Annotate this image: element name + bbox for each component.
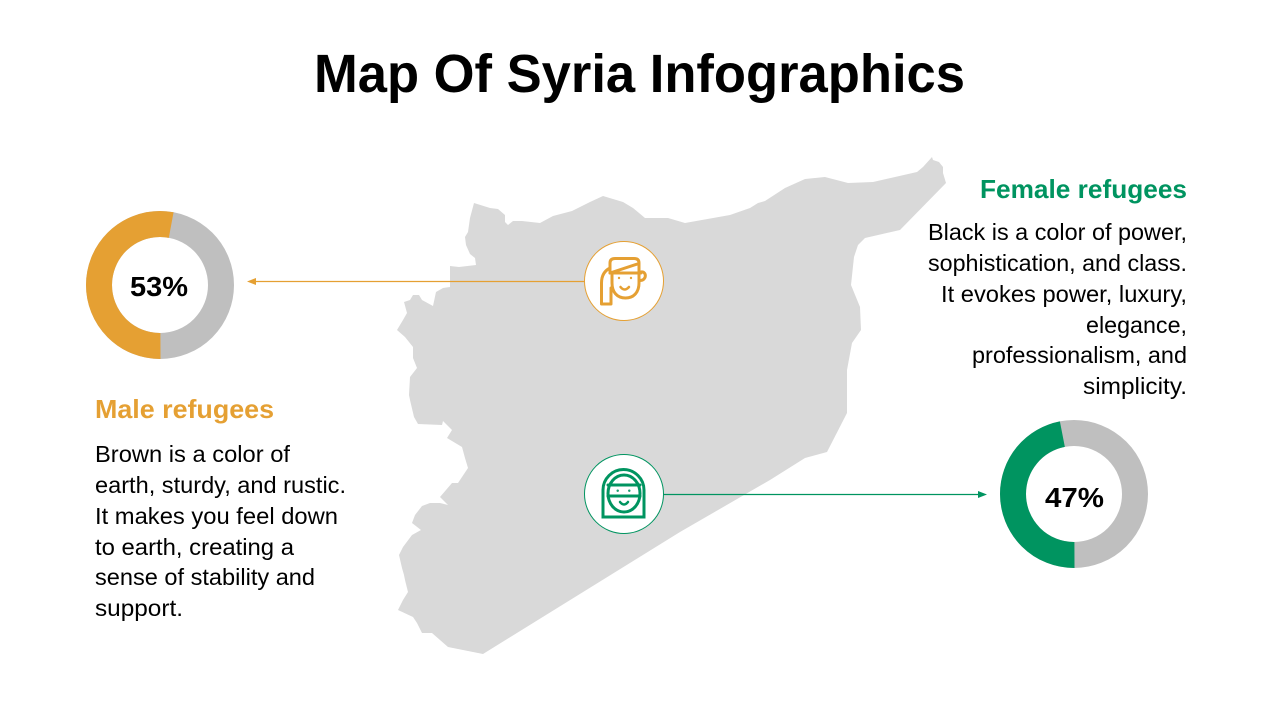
map of Syria <box>397 157 946 654</box>
text block: male description: to earth, creating a <box>95 534 294 560</box>
text block: female description: sophistication, and class. <box>928 250 1187 276</box>
title: Map Of Syria Infographics <box>314 44 965 104</box>
text block: female description: professionalism, and <box>972 342 1187 368</box>
donut chart: female 47%: 47% <box>1045 482 1104 513</box>
text block: male description: earth, sturdy, and rustic. <box>95 472 346 498</box>
icon: female refugee <box>584 454 664 534</box>
icon: male refugee <box>584 242 664 320</box>
arrow: male icon to male donut <box>247 278 585 285</box>
text block: male description: sense of stability and <box>95 564 315 590</box>
text block: male description: It makes you feel down <box>95 503 338 529</box>
heading: female refugees: Female refugees <box>980 174 1187 204</box>
text block: female description <box>928 219 1187 399</box>
text block: male description: support. <box>95 595 183 621</box>
text block: female description: It evokes power, luxury, <box>941 281 1187 307</box>
heading: male refugees: Male refugees <box>95 394 274 424</box>
text block: female description: elegance, <box>1086 312 1187 338</box>
text block: female description: simplicity. <box>1083 373 1187 399</box>
donut chart: male 53%: 53% <box>130 271 188 302</box>
arrow: female icon to female donut <box>663 491 987 498</box>
donut chart: male 53% <box>99 224 221 346</box>
donut chart: female 47% <box>1013 433 1135 555</box>
text block: male description: Brown is a color of <box>95 441 291 467</box>
text block: male description <box>95 441 346 621</box>
text block: female description: Black is a color of power, <box>928 219 1187 245</box>
